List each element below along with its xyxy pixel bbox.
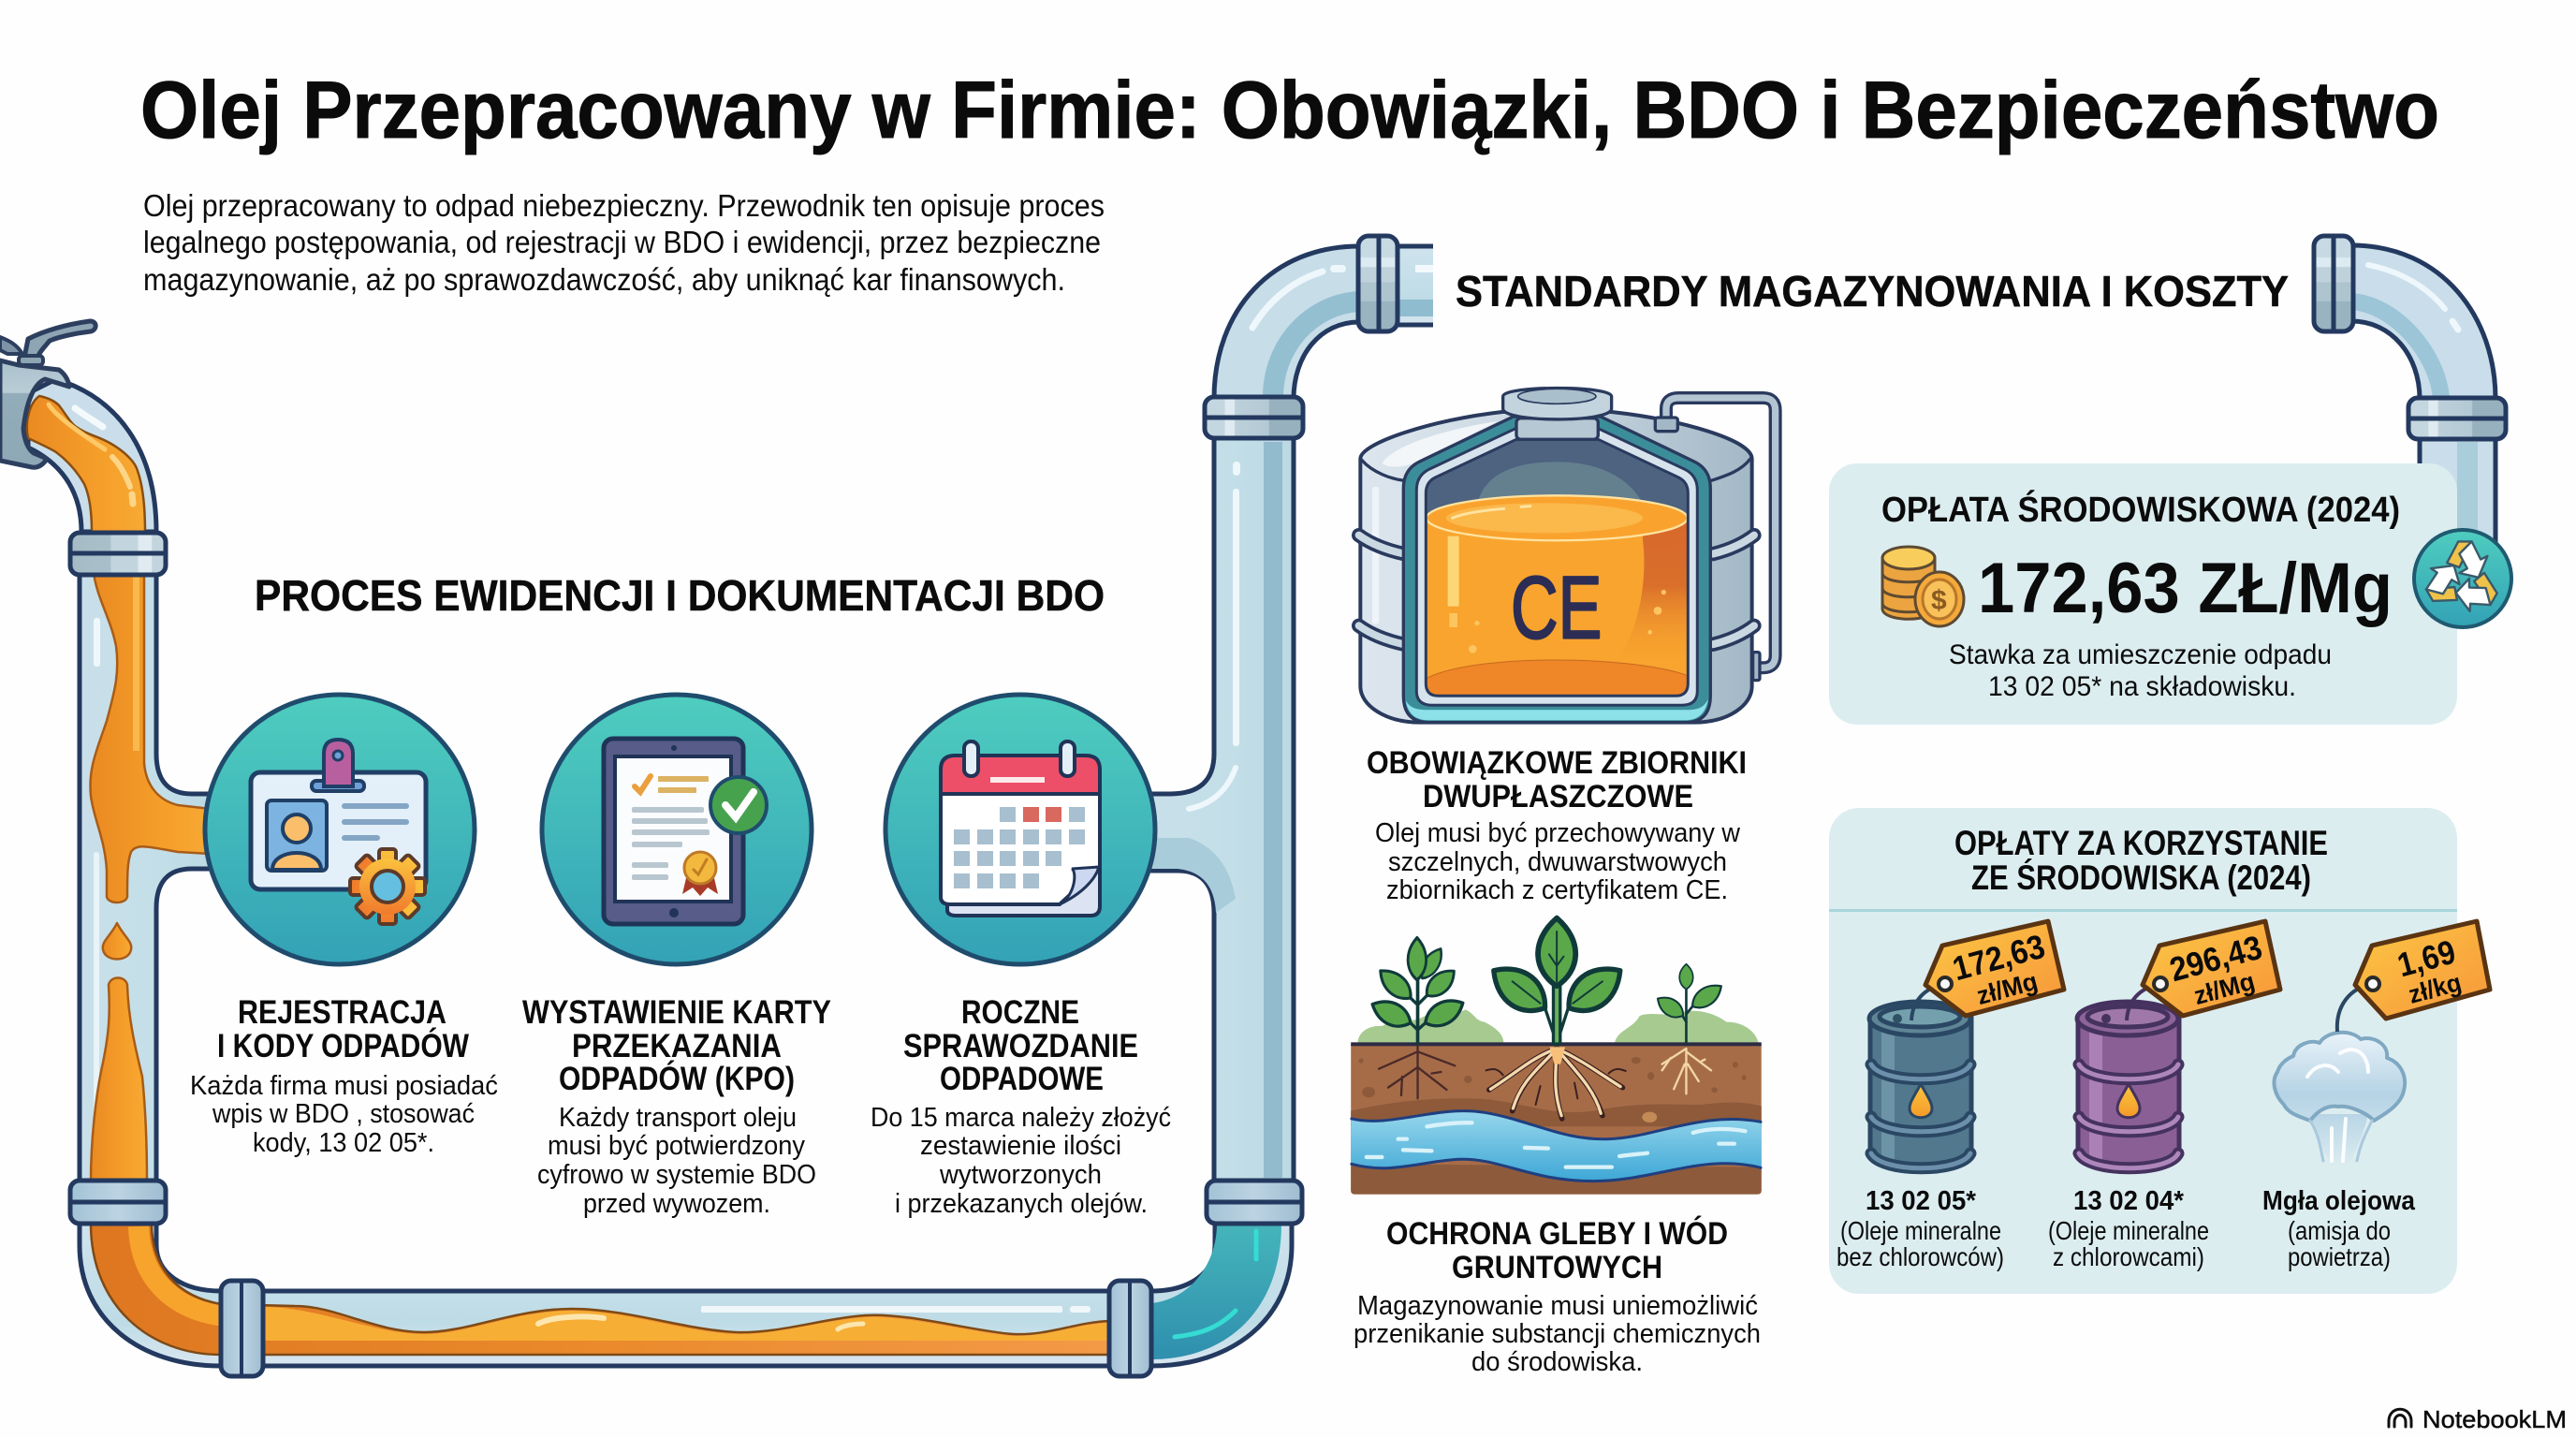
- label oil mist: Mgła olejowa: [2262, 1186, 2416, 1216]
- soil text: do środowiska.: [1471, 1347, 1643, 1377]
- step 1 text: Każda firma musi posiadać: [190, 1071, 498, 1101]
- icon: recycling: [2414, 530, 2511, 627]
- step 1 text: I KODY ODPADÓW: [217, 1027, 469, 1064]
- collar top right: [2408, 398, 2506, 439]
- soil text: przenikanie substancji chemicznych: [1354, 1319, 1761, 1349]
- step 3 text: i przekazanych olejów.: [895, 1189, 1148, 1219]
- intro text: magazynowanie, aż po sprawozdawczość, aby uniknąć kar finansowych.: [143, 262, 1065, 297]
- price tag 172,63: 172,63: [1949, 927, 2049, 988]
- left vertical pipe with branch: [80, 571, 215, 1181]
- price tag 296,43: 296,43: [2166, 928, 2266, 989]
- step 2 text: przed wywozem.: [583, 1189, 770, 1219]
- step 3 text: Do 15 marca należy złożyć: [871, 1103, 1171, 1133]
- heading: process: PROCES EWIDENCJI I DOKUMENTACJI BDO: [255, 571, 1105, 620]
- step 2 text: Każdy transport oleju: [559, 1103, 797, 1133]
- step 2 text: cyfrowo w systemie BDO: [537, 1160, 816, 1190]
- fee value: 172,63 ZŁ/Mg: [1978, 549, 2393, 628]
- logo: NotebookLM: NotebookLM: [2422, 1405, 2567, 1433]
- step 2 text: WYSTAWIENIE KARTY: [522, 994, 831, 1031]
- icon: soil and groundwater: [1351, 918, 1762, 1195]
- label oil mist: (amisja do: [2288, 1216, 2391, 1245]
- right elbow and lower left elbow glass: [80, 1222, 1292, 1366]
- panel: environmental fee: [1829, 463, 2457, 725]
- plant left: [1368, 938, 1468, 1044]
- pipe elbow top right: [2351, 245, 2496, 599]
- label oil mist: powietrza): [2288, 1242, 2391, 1271]
- oil in bottom pipe: [91, 1224, 1110, 1355]
- flange bottom left: [221, 1281, 263, 1376]
- label 13 02 04: z chlorowcami): [2053, 1242, 2204, 1271]
- collar top left: [70, 533, 166, 575]
- price tag 296,43: [2127, 921, 2280, 1020]
- step 3 text: wytworzonych: [939, 1160, 1102, 1190]
- icon: coins: [1882, 547, 1964, 626]
- heading: soil protection: GRUNTOWYCH: [1452, 1250, 1662, 1285]
- heading: tanks: OBOWIĄZKOWE ZBIORNIKI: [1367, 745, 1747, 781]
- barrel 13 02 04: [2077, 1002, 2179, 1172]
- oil in top elbow: [27, 396, 145, 532]
- panel heading: ZE ŚRODOWISKA (2024): [1971, 858, 2311, 897]
- label 13 02 05: [1837, 1186, 2004, 1271]
- step 2 text: PRZEKAZANIA: [572, 1028, 782, 1064]
- step 3 text: SPRAWOZDANIE: [903, 1028, 1138, 1064]
- step 1 text: kody, 13 02 05*.: [253, 1128, 434, 1158]
- label 13 02 04: [2048, 1186, 2209, 1271]
- icon: double-walled tank: CE: [1511, 559, 1602, 658]
- price tag 296,43: zł/Mg: [2191, 967, 2258, 1010]
- collar upper middle: [1205, 397, 1303, 438]
- tanks text: zbiornikach z certyfikatem CE.: [1386, 875, 1728, 905]
- price tag 1,69: zł/kg: [2406, 968, 2465, 1009]
- price tag 172,63: zł/Mg: [1974, 967, 2041, 1010]
- heading: soil protection: OCHRONA GLEBY I WÓD: [1386, 1216, 1728, 1252]
- fee note: 13 02 05* na składowisku.: [1988, 671, 2296, 702]
- pipe network: [0, 236, 2506, 1376]
- right vertical pipe with branch: [1137, 435, 1294, 1181]
- plant middle: [1484, 918, 1631, 1044]
- plant right: [1653, 964, 1726, 1044]
- label 13 02 05: 13 02 05*: [1866, 1186, 1977, 1216]
- heading: tanks: DWUPŁASZCZOWE: [1423, 779, 1693, 814]
- step 2 text: ODPADÓW (KPO): [559, 1060, 795, 1097]
- fee note: [1949, 639, 2332, 702]
- barrel 13 02 05: [1869, 1002, 1971, 1172]
- flange top right: [2314, 236, 2353, 331]
- soil text: Magazynowanie musi uniemożliwić: [1357, 1291, 1758, 1321]
- label 13 02 04: 13 02 04*: [2073, 1186, 2185, 1216]
- oil stream lower: [91, 977, 147, 1181]
- step 3 text: [871, 994, 1171, 1219]
- step 2 circle icon: tablet: [542, 695, 812, 964]
- title: Olej Przepracowany w Firmie: Obowiązki, BDO i Bezpieczeństwo: [140, 66, 2439, 155]
- flange top middle: [1358, 236, 1398, 331]
- label oil mist: [2262, 1186, 2416, 1271]
- collar lower right: [1207, 1181, 1302, 1224]
- panel heading: [1954, 824, 2328, 897]
- panel: usage fees: [1829, 808, 2490, 1294]
- heading: soil protection: [1354, 1216, 1761, 1377]
- oil drop: [103, 923, 131, 959]
- step 3 text: ODPADOWE: [940, 1061, 1104, 1097]
- icon: oil mist cloud: [2274, 1033, 2405, 1167]
- pipe elbow top left: [28, 379, 156, 532]
- tanks text: [1375, 818, 1741, 905]
- step 1 text: wpis w BDO , stosować: [212, 1099, 475, 1129]
- price tag 172,63: [1911, 921, 2064, 1020]
- label 13 02 04: (Oleje mineralne: [2048, 1216, 2209, 1245]
- heading: tanks: [1367, 745, 1747, 905]
- step 1 text: REJESTRACJA: [238, 994, 446, 1031]
- tanks text: Olej musi być przechowywany w: [1375, 818, 1741, 848]
- panel heading: OPŁATA ŚRODOWISKOWA (2024): [1881, 489, 2400, 530]
- step 3 text: zestawienie ilości: [920, 1131, 1121, 1161]
- flange bottom right: [1109, 1281, 1151, 1376]
- tanks text: szczelnych, dwuwarstwowych: [1388, 847, 1727, 877]
- gear: [350, 849, 425, 924]
- step 2 text: musi być potwierdzony: [548, 1131, 805, 1161]
- intro text: legalnego postępowania, od rejestracji w BDO i ewidencji, przez bezpieczne: [143, 225, 1101, 259]
- collar lower left: [70, 1181, 166, 1224]
- step 1 circle icon: id card: [205, 695, 475, 964]
- step 2 text: [522, 994, 831, 1219]
- step 1 text: [190, 994, 498, 1158]
- step 3 circle icon: calendar: [886, 695, 1155, 964]
- intro text: [143, 188, 1105, 297]
- top elbow middle: [1214, 246, 1359, 399]
- oil stream left pipe: [90, 573, 211, 902]
- label 13 02 05: bez chlorowców): [1837, 1242, 2004, 1271]
- intro text: Olej przepracowany to odpad niebezpieczny. Przewodnik ten opisuje proces: [143, 188, 1105, 223]
- step 3 text: ROCZNE: [961, 994, 1079, 1031]
- pipe stub top middle: [1395, 246, 1433, 325]
- label 13 02 05: (Oleje mineralne: [1840, 1216, 2001, 1245]
- fee note: Stawka za umieszczenie odpadu: [1949, 639, 2332, 670]
- heading: storage: STANDARDY MAGAZYNOWANIA I KOSZTY: [1456, 267, 2289, 315]
- teal liquid: [1151, 1224, 1281, 1359]
- price tag 1,69: [2337, 921, 2490, 1032]
- icon: double-walled tank: [1359, 389, 1776, 723]
- soil text: [1354, 1291, 1761, 1377]
- price tag 1,69: 1,69: [2393, 932, 2459, 984]
- faucet spout and handle: [0, 321, 95, 467]
- panel heading: OPŁATY ZA KORZYSTANIE: [1954, 824, 2328, 862]
- panel: environmental fee: $: [1931, 585, 1947, 616]
